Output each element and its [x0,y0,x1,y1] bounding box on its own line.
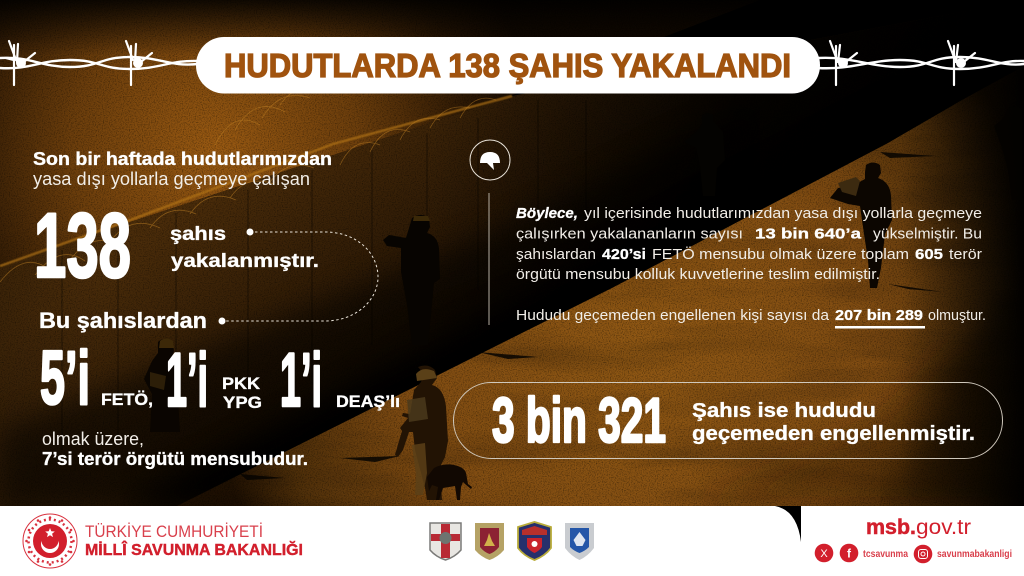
handle: tcsavunma: tcsavunma [863,549,908,560]
soldier silhouette far [684,113,725,196]
prevented total line: 207 bin 289 [835,307,923,324]
callout: 3 bin 321: geçemeden engellenmiştir. [692,423,975,445]
dog [427,464,472,500]
vertical divider [488,193,490,325]
title banner: HUDUTLARDA 138 ŞAHIS YAKALANDI [224,47,791,84]
website [866,516,971,539]
icon: X: X [820,548,828,560]
ministry logo [23,514,77,568]
paragraph: 13 bin 640’a [755,226,862,242]
callout: 3 bin 321 [454,382,1002,458]
razor wire coils [0,90,496,282]
breakdown by organisation: PKK [222,374,261,393]
emblem: general staff [430,523,461,560]
website: msb. [866,516,916,539]
callout: 3 bin 321: Şahıs ise hududu [692,400,876,422]
ministry name: MİLLÎ SAVUNMA BAKANLIĞI [85,540,303,559]
paragraph: 420’si [602,246,646,263]
wall top lit ledge [0,96,512,266]
barbed wire: right [818,41,1024,85]
wall panel seams [62,100,586,450]
road shadow strokes [240,152,943,480]
paragraph: FETÖ mensubu olmak üzere toplam [652,245,909,263]
summary text: olmak üzere, [42,429,144,449]
main soldier with dog [395,366,472,500]
paragraph: 605 [915,246,943,263]
breakdown by organisation: YPG [223,393,262,412]
emblem: air forces [565,523,594,560]
soldier silhouette far left [144,338,180,432]
title banner [196,37,820,94]
intro text: Son bir haftada hudutlarımızdan [33,149,332,169]
paragraph: yükselmiştir. Bu [873,226,982,242]
barbed wire: left [0,41,198,85]
caught label: şahıs [170,224,226,245]
soldier silhouette on wall [383,215,440,345]
website: gov.tr [916,516,971,539]
breakdown by organisation: 1’i [166,338,208,423]
paragraph: örgütü mensubu kolluk kuvvetlerine teslim edilmiştir. [516,266,880,283]
breakdown by organisation: 1’i [280,338,322,423]
paragraph: terör [949,246,982,263]
paragraph: şahıslardan [516,246,596,263]
breakdown by organisation [40,336,400,423]
breakdown by organisation: DEAŞ’lı [336,392,400,411]
paragraph [516,205,982,283]
caught label [170,224,319,272]
intro text: yasa dışı yollarla geçmeye çalışan [33,169,310,189]
breakdown by organisation: 5’i [40,336,90,421]
prevented total line: olmuştur. [928,307,986,324]
icon: facebook: f [847,546,852,560]
dashed connector [218,228,378,324]
emblem: land forces [475,523,504,560]
icon: X [815,544,833,562]
intro text [33,149,332,189]
prevented total line: Hududu geçemeden engellenen kişi sayısı da [516,307,830,324]
callout: 3 bin 321: 3 bin 321 [492,386,666,456]
breakdown by organisation: FETÖ, [101,390,153,409]
big number 138: 138 [34,195,131,297]
ministry name [85,522,303,559]
prevented total line [516,307,986,328]
handle: savunmabakanligi: savunmabakanligi [937,549,1012,560]
summary text [42,429,308,469]
soldier silhouette on road [830,162,892,288]
subheading: Bu şahıslardan [39,308,207,333]
icon: helmet [470,140,510,180]
summary text: 7’si terör örgütü mensubudur. [42,449,308,469]
emblem: naval forces [518,522,551,560]
soldier silhouette far right [994,106,1022,200]
paragraph: yıl içerisinde hudutlarımızdan yasa dışı yollarla geçmeye [584,205,982,222]
caught label: yakalanmıştır. [171,251,319,272]
icon: instagram [914,545,932,563]
paragraph: Böylece, [516,205,578,222]
paragraph: çalışırken yakalananların sayısı [516,226,743,242]
ministry name: TÜRKİYE CUMHURİYETİ [85,522,263,541]
footer band [0,506,1024,576]
icon: facebook [840,544,858,562]
